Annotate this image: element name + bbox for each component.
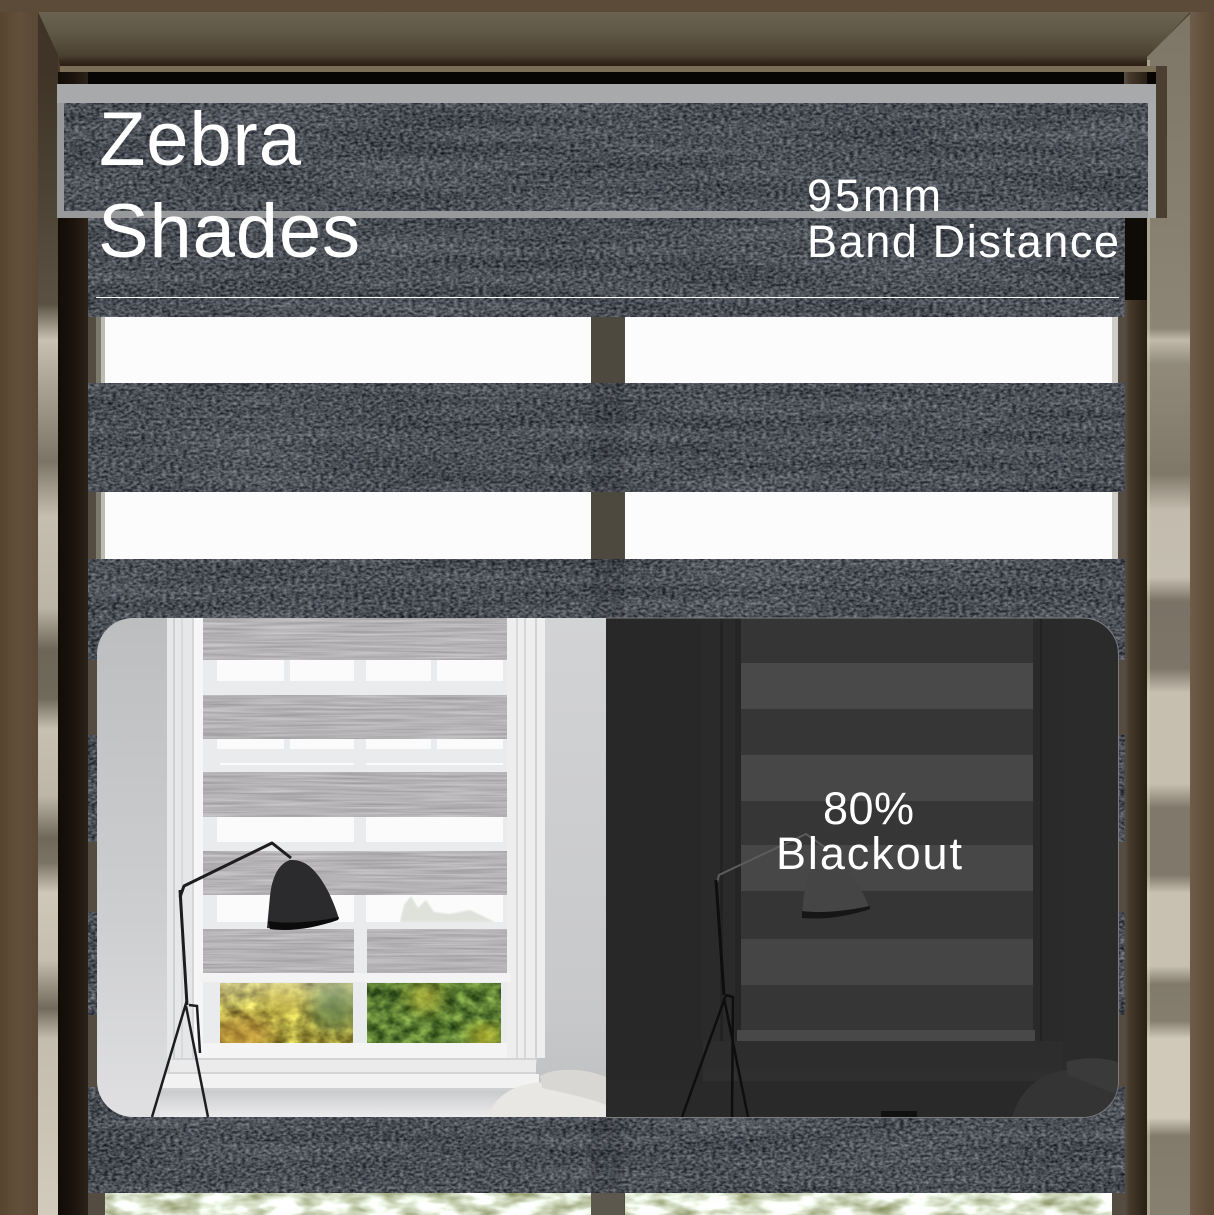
title: Zebra (99, 97, 302, 182)
panel: light vs blackout comparison (97, 618, 1118, 1117)
small dark vase (881, 1111, 917, 1117)
zebra fabric bands (88, 218, 1125, 1193)
cushion (488, 1070, 606, 1117)
floor lamp (152, 843, 339, 1117)
panel outline on blackout side (606, 618, 1119, 1118)
blackout label (780, 792, 962, 870)
dark cushion (1012, 1058, 1118, 1117)
title (98, 97, 360, 274)
bottom rail (200, 973, 510, 982)
divider line (96, 296, 1119, 298)
blackout label: 80% (823, 783, 914, 834)
title: Shades (98, 189, 360, 274)
window sill (160, 1043, 545, 1091)
panel: blackout room (606, 618, 1118, 1117)
window glass panes behind the shade (96, 317, 1118, 559)
landscape view: right pane (367, 983, 501, 1046)
headrail cassette (57, 66, 1167, 218)
dark shade bands (737, 618, 1035, 1041)
blackout label: Blackout (776, 828, 962, 879)
landscape view: left pane (220, 983, 353, 1043)
band distance label: 95mm (807, 170, 941, 221)
band distance label: Band Distance (807, 216, 1119, 267)
distant tree (400, 896, 495, 922)
band distance label (807, 170, 1119, 267)
outdoor foliage below the shade (105, 1193, 1112, 1215)
panel: daylight room (97, 618, 606, 1117)
dark floor lamp (682, 834, 870, 1117)
roller shade bands (203, 618, 507, 973)
window panes (217, 660, 503, 922)
